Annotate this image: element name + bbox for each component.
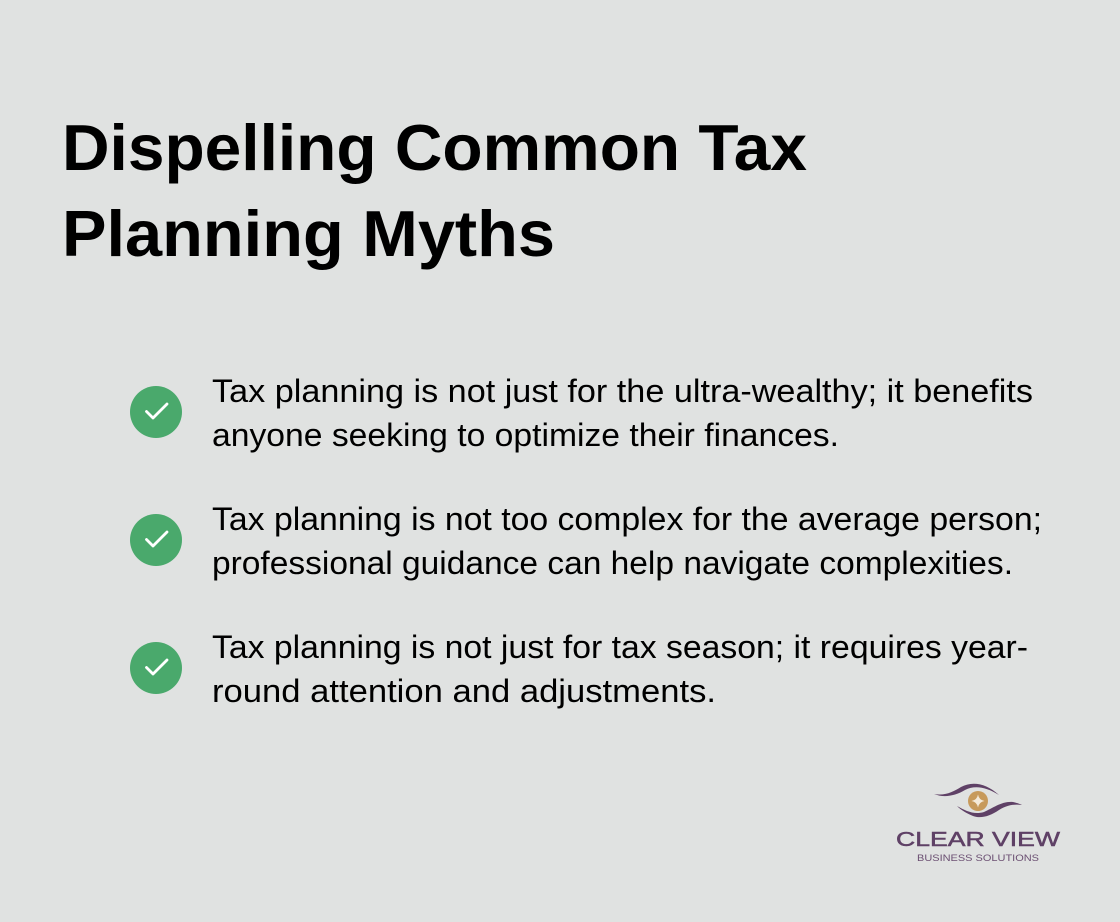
text: myth 3: Tax planning is not just for tax season; it requires year- <box>212 629 1028 665</box>
icon: check badge 2 <box>130 514 182 566</box>
text: myth 2: Tax planning is not too complex for the average person; <box>212 501 1042 537</box>
icon: eye swooshes <box>934 784 1022 817</box>
title: Planning Myths <box>62 197 555 270</box>
item 3 <box>130 629 1028 709</box>
logo wordmark: CLEAR VIEW <box>896 829 1060 851</box>
text: myth 1: anyone seeking to optimize their finances. <box>212 417 839 453</box>
title <box>62 111 807 270</box>
icon: check badge 1 <box>130 386 182 438</box>
text: myth 2 <box>212 501 1042 581</box>
text: myth 2: professional guidance can help navigate complexities. <box>212 545 1013 581</box>
text: myth 3: round attention and adjustments. <box>212 673 716 709</box>
title: Dispelling Common Tax <box>62 111 807 184</box>
text: myth 1 <box>212 373 1033 453</box>
text: myth 3 <box>212 629 1028 709</box>
icon: gold star circle <box>968 791 988 811</box>
item 2 <box>130 501 1042 581</box>
logo: Clear View Business Solutions <box>896 784 1060 864</box>
icon: check badge 3 <box>130 642 182 694</box>
logo tagline: BUSINESS SOLUTIONS <box>917 853 1039 864</box>
item 1 <box>130 373 1033 453</box>
text: myth 1: Tax planning is not just for the ultra-wealthy; it benefits <box>212 373 1033 409</box>
